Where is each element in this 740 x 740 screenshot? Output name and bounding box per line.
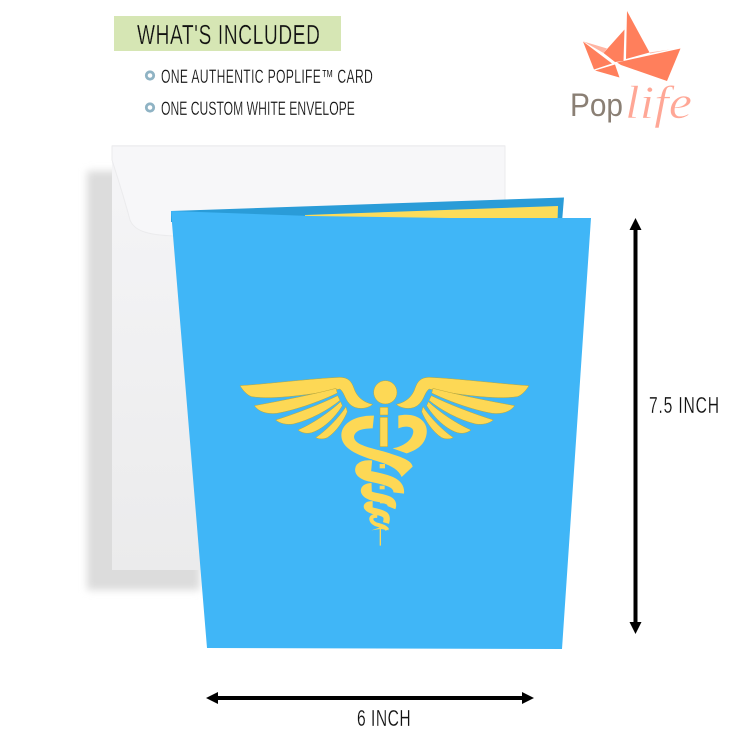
staff foot: [371, 527, 389, 546]
envelope shadow: [87, 171, 200, 590]
icon: caduceus: [240, 377, 529, 546]
icon: bullet one: [146, 72, 154, 79]
card: yellow insert: [305, 206, 558, 222]
left wing: [240, 377, 373, 439]
heading: what's included: WHAT'S INCLUDED: [137, 19, 320, 51]
staff squares: [380, 464, 385, 503]
arrow: width: [206, 692, 534, 704]
envelope flap: [112, 146, 505, 236]
label: width: 6 INCH: [357, 706, 411, 732]
snakes: [341, 415, 427, 477]
arrow: height: [630, 218, 642, 634]
right wing: [396, 377, 529, 439]
card: back panel: [171, 198, 564, 222]
list: included items: [146, 68, 373, 120]
wordmark: life: life: [625, 77, 692, 129]
item: card: ONE AUTHENTIC POPLIFE™ CARD: [161, 68, 373, 88]
staff: [380, 407, 388, 447]
icon: bullet two: [146, 104, 154, 111]
staff head: [374, 381, 397, 404]
label: height: 7.5 INCH: [649, 393, 719, 419]
card: front panel: [171, 211, 591, 649]
envelope: [112, 145, 505, 570]
logo: poplife: [570, 11, 692, 129]
icon: paper boat: [583, 11, 680, 81]
item: envelope: ONE CUSTOM WHITE ENVELOPE: [161, 100, 355, 120]
wordmark: pop: Pop: [570, 87, 623, 123]
